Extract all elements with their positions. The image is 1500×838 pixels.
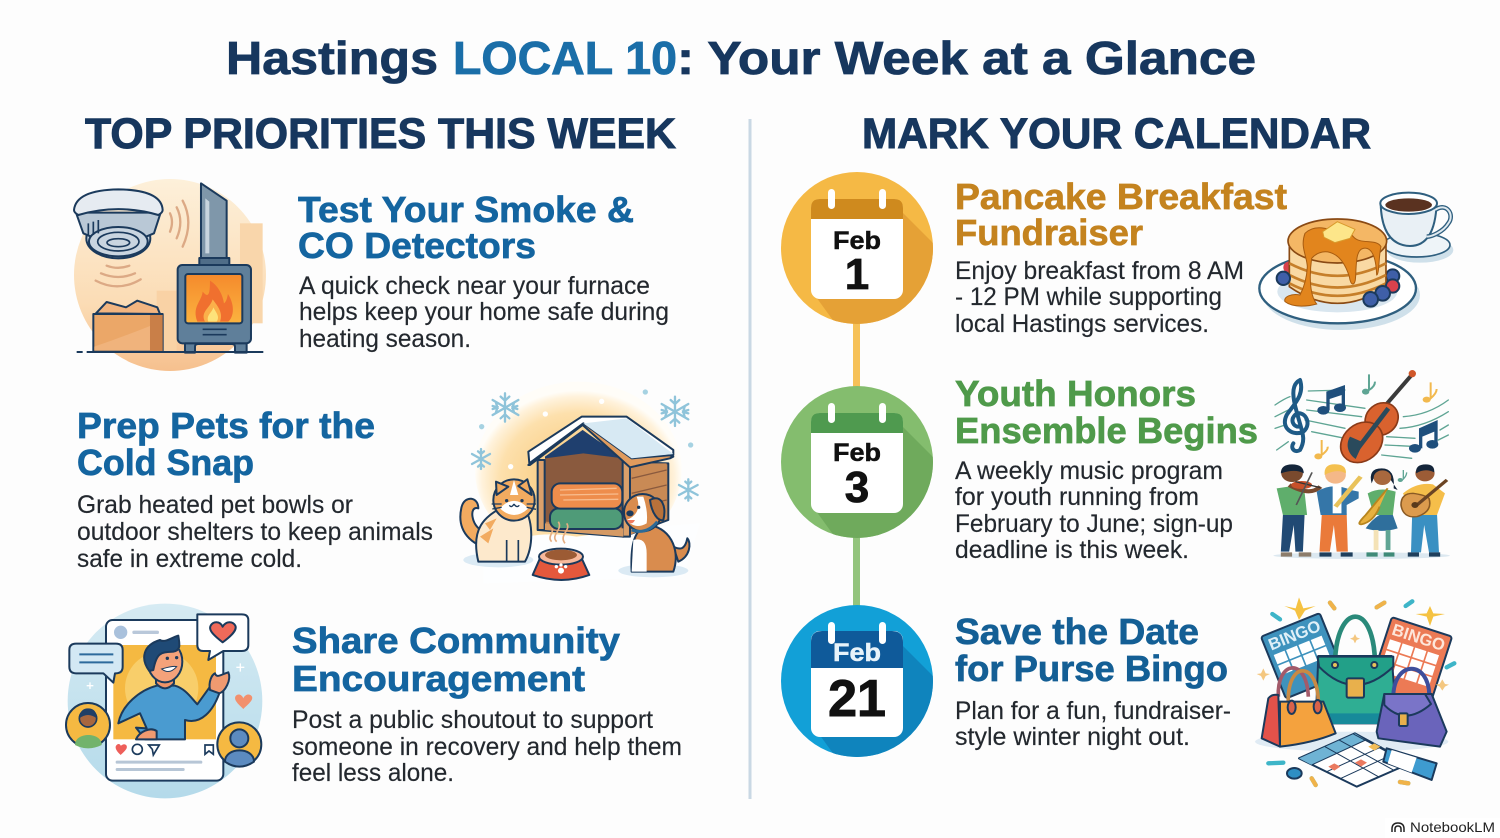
text: youth description: deadline is this week. (955, 536, 1189, 564)
text: bingo description: Plan for a fun, fundraiser- (955, 697, 1231, 725)
text: pancake description: - 12 PM while supporting (955, 283, 1222, 311)
heading: share community encouragement: Encouragement (292, 658, 585, 699)
icon: social media post (66, 604, 262, 798)
text: pancake description: Enjoy breakfast from 8 AM (955, 257, 1244, 285)
heading: test your smoke and co detectors (298, 189, 634, 266)
text: encouragement description: someone in recovery and help them (292, 733, 682, 761)
icon: purse bingo: BINGO (1266, 616, 1323, 654)
icon: calendar feb 21: Feb (833, 639, 881, 667)
text: pancake description: local Hastings services. (955, 310, 1209, 338)
text: encouragement description: Post a public shoutout to support (292, 706, 653, 734)
heading: save the date (955, 611, 1228, 689)
heading: test your smoke and co detectors: Test Your Smoke & (298, 189, 634, 230)
panel: calendar timeline (781, 172, 1454, 787)
title: Hastings (226, 32, 438, 84)
icon: calendar feb 21 (781, 605, 940, 763)
title: : Your Week at a Glance (677, 32, 1256, 84)
heading: save the date: Save the Date (955, 611, 1199, 652)
icon: calendar feb 1: 1 (845, 250, 869, 299)
icon: purse bingo: BINGO (1390, 620, 1447, 655)
heading: mark your calendar: MARK YOUR CALENDAR (862, 110, 1371, 158)
heading: prep pets (77, 405, 375, 483)
text: bingo description (955, 697, 1231, 751)
icon: calendar feb 3 (781, 386, 940, 544)
heading: pancake breakfast: Pancake Breakfast (955, 176, 1287, 217)
text: pancake description (955, 257, 1244, 338)
icon: pancakes and coffee (1259, 193, 1453, 330)
icon: youth music ensemble (1273, 370, 1450, 559)
panel: top priorities (66, 179, 700, 798)
title: LOCAL 10 (453, 32, 677, 84)
icon: calendar feb 1: Feb (833, 227, 881, 255)
heading: youth honors ensemble (955, 373, 1258, 451)
logo: notebooklm (1385, 818, 1500, 838)
icon: purse bingo (1255, 597, 1454, 787)
heading: prep pets: Cold Snap (77, 442, 254, 483)
title (226, 32, 1256, 84)
text: detectors description: helps keep your home safe during (299, 298, 669, 326)
text: detectors description: heating season. (299, 325, 471, 353)
text: bingo description: style winter night out. (955, 723, 1190, 751)
text: detectors description: A quick check near your furnace (299, 272, 650, 300)
heading: share community encouragement (292, 620, 620, 699)
text: encouragement description (292, 706, 682, 787)
heading: test your smoke and co detectors: CO Detectors (298, 225, 536, 266)
heading: youth honors ensemble: Youth Honors (955, 373, 1196, 414)
text: youth description: February to June; sign-up (955, 510, 1233, 538)
heading: youth honors ensemble: Ensemble Begins (955, 410, 1258, 451)
heading: pancake breakfast (955, 176, 1287, 253)
text: youth description: A weekly music program (955, 457, 1223, 485)
logo: notebooklm: NotebookLM (1410, 819, 1495, 835)
heading: save the date: for Purse Bingo (955, 648, 1228, 689)
text: encouragement description: feel less alone. (292, 759, 454, 787)
text: pets description (77, 491, 433, 573)
text: detectors description (299, 272, 669, 353)
text: pets description: safe in extreme cold. (77, 545, 302, 573)
text: pets description: Grab heated pet bowls or (77, 491, 353, 519)
icon: pets and dog house (460, 382, 700, 583)
text: youth description: for youth running from (955, 483, 1199, 511)
heading: prep pets: Prep Pets for the (77, 405, 375, 446)
icon: calendar feb 3: Feb (833, 439, 881, 467)
icon: smoke detector and wood stove (74, 179, 266, 371)
heading: share community encouragement: Share Community (292, 620, 620, 661)
icon: calendar feb 21: 21 (828, 670, 886, 728)
icon: calendar feb 3: 3 (845, 463, 869, 512)
text: pets description: outdoor shelters to keep animals (77, 518, 433, 546)
text: youth description (955, 457, 1233, 564)
icon: calendar feb 1 (781, 172, 940, 330)
heading: pancake breakfast: Fundraiser (955, 212, 1143, 253)
heading: top priorities: TOP PRIORITIES THIS WEEK (85, 110, 676, 158)
